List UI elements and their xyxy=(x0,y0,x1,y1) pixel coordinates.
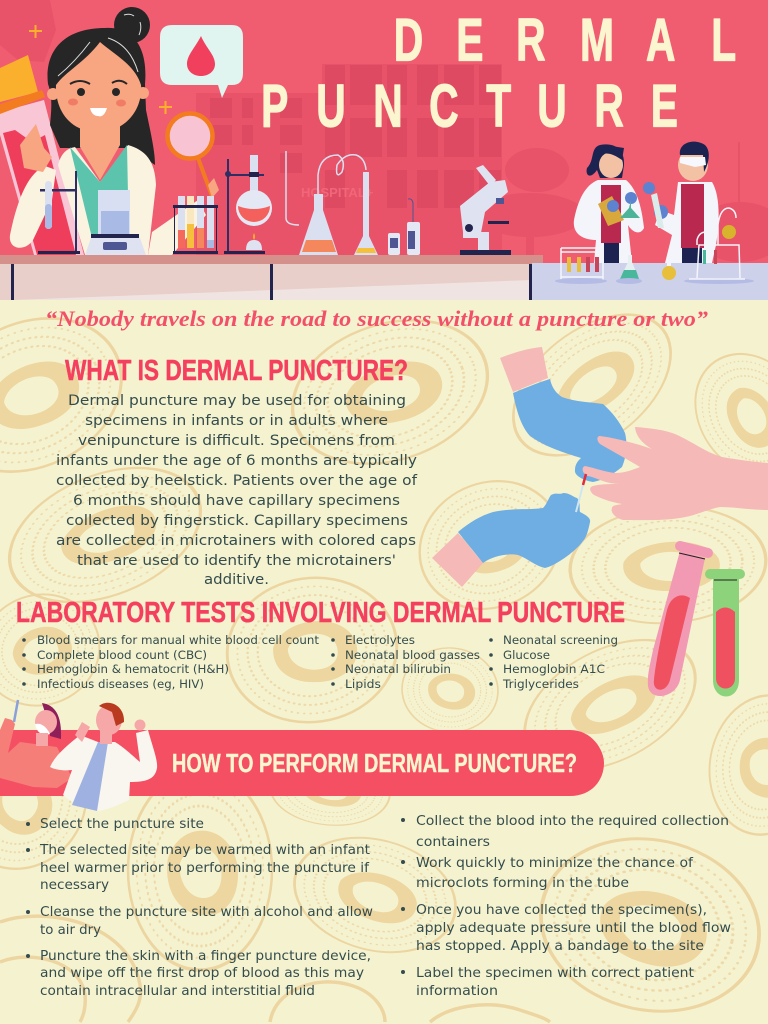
magnifying glass xyxy=(168,114,219,198)
list column 1: Blood smears for manual white blood cell count xyxy=(37,633,319,647)
paragraph: definition: 6 months should have capillary specimens xyxy=(73,493,400,509)
table glassware xyxy=(555,208,754,284)
steps list: left column: heel warmer prior to performing the puncture if xyxy=(40,860,370,876)
paragraph: definition: additive. xyxy=(204,572,269,588)
paragraph: definition: specimens in infants or in adults where xyxy=(85,413,388,429)
list column 2: Neonatal bilirubin xyxy=(345,662,451,676)
banner xyxy=(0,700,604,811)
list column 3: Glucose xyxy=(503,648,550,662)
steps list: left column: The selected site may be warmed with an infant xyxy=(39,842,370,858)
list column 3: Neonatal screening xyxy=(503,633,618,647)
sparkle icons xyxy=(29,25,172,114)
title: Puncture: PUNCTURE xyxy=(261,73,678,139)
green tube xyxy=(705,569,745,696)
big specimen tube xyxy=(0,55,84,255)
steps list: left column: contain intracellular and interstitial fluid xyxy=(40,983,315,999)
illustration: gloved hands lancing finger xyxy=(432,347,768,587)
scientists at lab table xyxy=(555,142,754,284)
list column 1: Hemoglobin & hematocrit (H&H) xyxy=(37,662,229,676)
erlenmeyer flask with tubing xyxy=(286,151,366,255)
list column 1: Infectious diseases (eg, HIV) xyxy=(37,677,204,691)
desk xyxy=(0,255,543,300)
steps list: right column: Label the specimen with correct patient xyxy=(416,965,694,981)
female scientist xyxy=(574,144,644,263)
list column 2: Lipids xyxy=(345,677,381,691)
steps list: right column: Work quickly to minimize the chance of xyxy=(416,855,694,871)
paragraph: definition: infants under the age of 6 months are typically xyxy=(56,453,417,469)
list column 1 xyxy=(22,633,319,691)
pink tube xyxy=(648,546,708,696)
paragraph: definition: collected by fingerstick. Capillary specimens xyxy=(66,513,408,529)
nurse with syringe xyxy=(0,700,72,788)
heading: what is dermal puncture: WHAT IS DERMAL PUNCTURE? xyxy=(65,355,408,387)
list column 3: Triglycerides xyxy=(502,677,579,691)
steps list: left column xyxy=(26,816,373,999)
background: hospital sign: HOSPITAL+ xyxy=(301,185,374,200)
paragraph: definition: collected by heelstick. Patients over the age of xyxy=(56,473,418,489)
paragraph: definition xyxy=(56,393,418,588)
test tube rack xyxy=(173,196,218,254)
speech bubble with blood drop xyxy=(160,25,243,98)
steps list: right column: information xyxy=(416,983,498,999)
steps list: right column: containers xyxy=(416,834,490,850)
list column 2: Neonatal blood gasses xyxy=(345,648,480,662)
steps list: left column: Select the puncture site xyxy=(40,816,204,832)
list column 1: Complete blood count (CBC) xyxy=(37,648,207,662)
illustration: test tubes xyxy=(648,546,745,696)
paragraph: definition: that are used to identify the microtainers' xyxy=(77,553,396,569)
lab tests list xyxy=(22,633,618,691)
steps list: left column: and wipe off the first drop of blood as this may xyxy=(40,965,364,981)
steps list: right column: apply adequate pressure until the blood flow xyxy=(416,920,731,936)
male scientist xyxy=(643,142,719,263)
microscope xyxy=(460,165,511,255)
paragraph: definition: Dermal puncture may be used for obtaining xyxy=(68,393,406,409)
list column 2: Electrolytes xyxy=(345,633,415,647)
background: hospital building xyxy=(0,0,768,262)
steps list: right column: has stopped. Apply a bandage to the site xyxy=(416,938,704,954)
lab table xyxy=(532,263,768,300)
steps list: right column: Once you have collected the specimen(s), xyxy=(416,902,707,918)
steps list: left column: necessary xyxy=(40,877,109,893)
ring stand with tube xyxy=(38,171,80,254)
quote: “Nobody travels on the road to success without a puncture or two” xyxy=(45,306,708,331)
woman scientist xyxy=(10,7,206,255)
steps list: left column: to air dry xyxy=(40,922,101,938)
steps list: left column: Puncture the skin with a finger puncture device, xyxy=(40,948,371,964)
steps list: right column xyxy=(401,813,731,999)
background pattern: blood cells xyxy=(0,286,768,1024)
paragraph: definition: venipuncture is difficult. Specimens from xyxy=(78,433,395,449)
conical tube xyxy=(354,172,378,255)
list column 3: Hemoglobin A1C xyxy=(503,662,605,676)
beaker on stirrer xyxy=(85,190,146,255)
heading: laboratory tests: LABORATORY TESTS INVOLVING DERMAL PUNCTURE xyxy=(16,597,625,629)
header panel xyxy=(0,0,768,300)
list column 3 xyxy=(489,633,618,691)
doctor in white coat xyxy=(50,703,157,811)
banner heading: HOW TO PERFORM DERMAL PUNCTURE? xyxy=(172,748,577,778)
title: Dermal: DERMAL xyxy=(394,7,736,73)
reagent bottles xyxy=(388,199,420,255)
round flask on stand xyxy=(224,155,272,254)
steps list: right column: Collect the blood into the required collection xyxy=(416,813,729,829)
steps list: left column: Cleanse the puncture site with alcohol and allow xyxy=(40,904,373,920)
list column 2 xyxy=(331,633,480,691)
steps list: right column: microclots forming in the tube xyxy=(416,875,629,891)
paragraph: definition: are collected in microtainers with colored caps xyxy=(56,533,416,549)
